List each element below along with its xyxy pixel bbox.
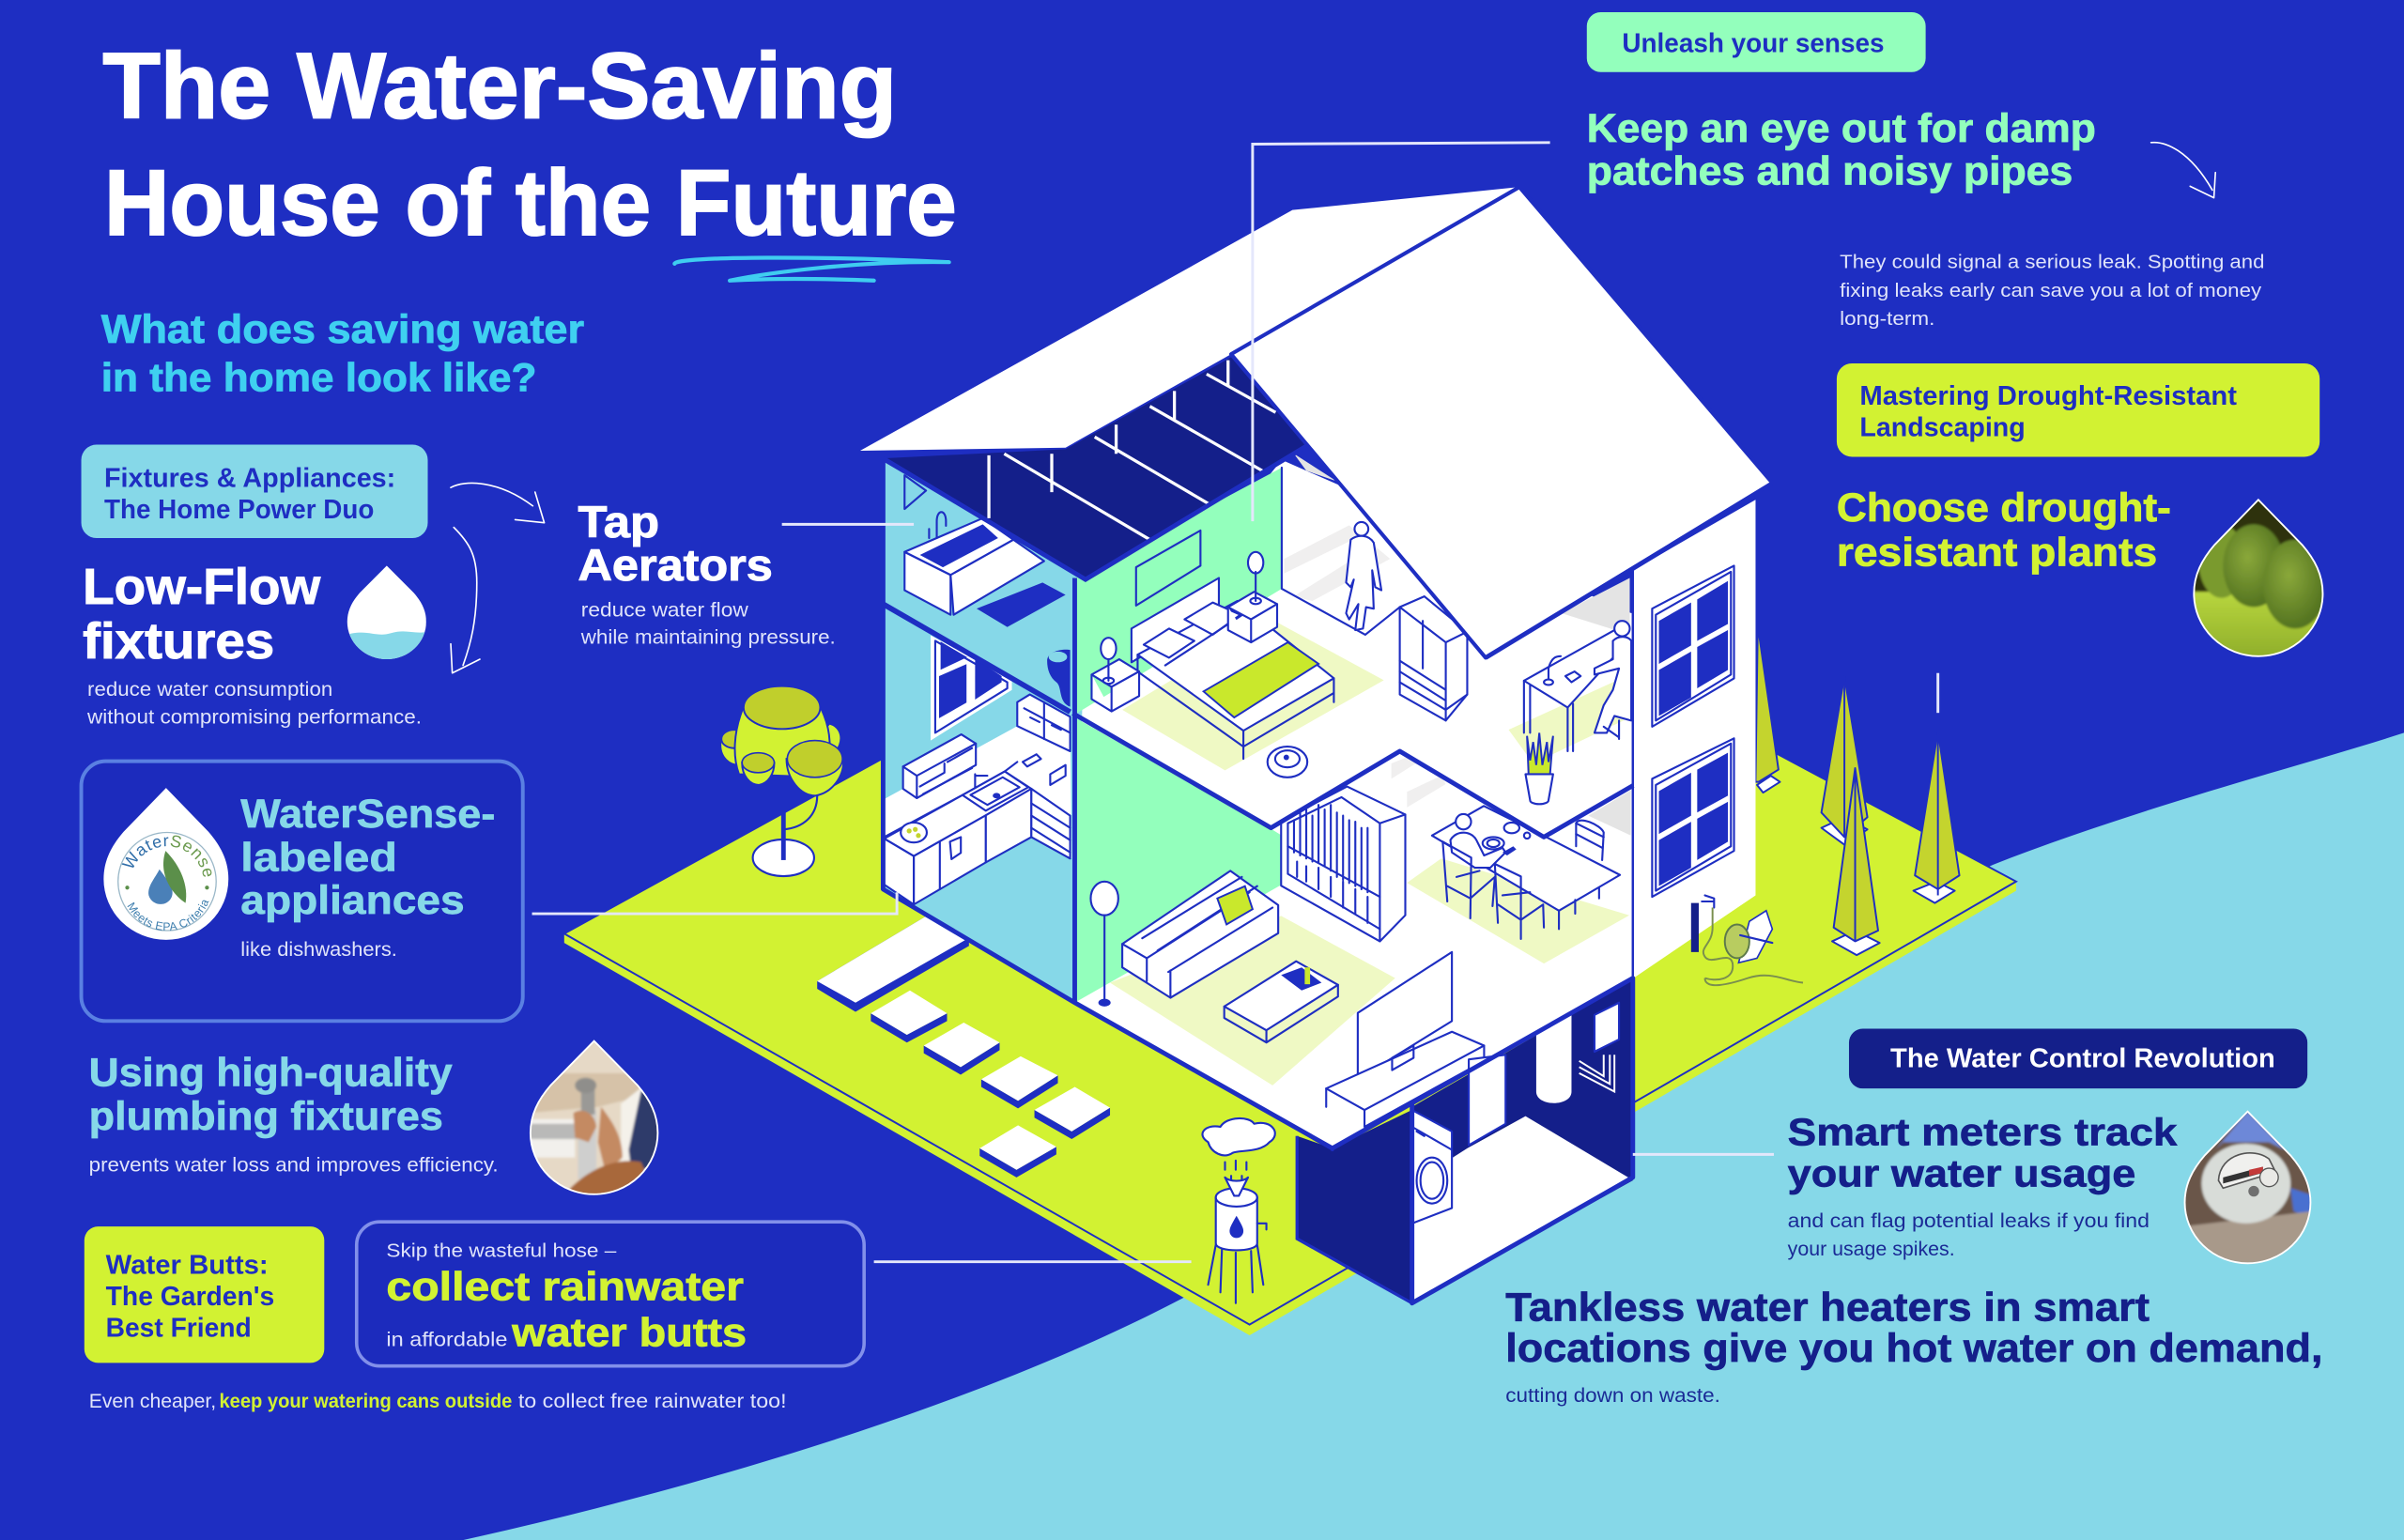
heading: drought-resistant plants: resistant plants — [1837, 530, 2157, 574]
panel: collect rainwater: water butts — [511, 1310, 747, 1354]
label: water butts — [85, 1226, 324, 1363]
isometric garden platform — [564, 514, 2016, 1335]
icon: plumbing photo drop — [529, 1040, 661, 1195]
text: leak explanation — [1840, 253, 2264, 330]
heading: tankless water heaters: cutting down on waste. — [1505, 1385, 1720, 1407]
label: fixtures and appliances: Fixtures & Appliances: — [104, 463, 395, 493]
house: bathroom and kitchen cyan wall — [883, 461, 1086, 1003]
panel: collect rainwater: collect rainwater — [386, 1264, 744, 1308]
heading: damp patches — [1587, 106, 2096, 193]
icon: WaterSense logo drop: WaterSense — [122, 836, 212, 877]
house: mint green walls — [1074, 468, 1282, 1003]
heading: smart meters: Smart meters track — [1788, 1111, 2178, 1154]
panel: collect rainwater — [357, 1222, 864, 1366]
label: water butts: Best Friend — [106, 1313, 252, 1343]
heading: damp patches: patches and noisy pipes — [1587, 149, 2073, 193]
label: drought-resistant landscaping: Landscaping — [1859, 412, 2026, 442]
arrow: to tap aerators — [451, 483, 545, 523]
title: House of the Future — [104, 151, 957, 255]
icon: WaterSense logo drop: Meets EPA Criteria — [128, 900, 208, 932]
heading: high-quality plumbing fixtures: prevents water loss and improves efficiency. — [89, 1154, 499, 1176]
label: unleash your senses: Unleash your senses — [1622, 29, 1885, 59]
title: The Water-Saving — [102, 35, 897, 139]
subtitle: in the home look like? — [101, 355, 536, 399]
house: lower room details — [1090, 756, 1631, 1127]
icon: left tree — [720, 686, 843, 876]
icon: rainwater butt with cloud — [1202, 1118, 1275, 1303]
text: leak explanation: fixing leaks early can save you a lot of money — [1840, 281, 2262, 301]
text: watering cans note: keep your watering cans outside — [219, 1391, 512, 1412]
subtitle — [101, 307, 584, 399]
house: kitchen with counters — [883, 636, 1071, 904]
house: basement utility room — [1297, 978, 1633, 1303]
label: fixtures and appliances — [82, 444, 428, 538]
background curve: light water area — [460, 732, 2404, 1540]
icon: step stones — [817, 916, 1110, 1178]
label: unleash your senses — [1587, 12, 1926, 72]
label: water butts: Water Butts: — [106, 1251, 269, 1281]
house: upper floor slab outline — [1074, 715, 1631, 837]
heading: smart meters: and can flag potential leaks if you find — [1788, 1210, 2150, 1232]
label: drought-resistant landscaping: Mastering Drought-Resistant — [1859, 381, 2238, 411]
panel: WaterSense appliances: labeled — [240, 835, 397, 879]
house: upper room details — [1091, 454, 1631, 804]
heading: drought-resistant plants — [1837, 485, 2171, 574]
heading: low-flow fixtures: fixtures — [83, 613, 274, 670]
text: leak explanation: They could signal a serious leak. Spotting and — [1840, 253, 2264, 273]
heading: low-flow fixtures: without compromising performance. — [86, 707, 422, 729]
text: watering cans note — [89, 1391, 787, 1412]
panel: WaterSense appliances: like dishwashers. — [240, 939, 397, 961]
heading: low-flow fixtures — [83, 559, 422, 729]
icon: garden tap and hose reel — [1691, 895, 1803, 985]
panel: WaterSense appliances: appliances — [240, 878, 465, 922]
label: fixtures and appliances: The Home Power Duo — [104, 495, 374, 525]
heading: tap aerators: Tap — [578, 498, 659, 547]
label: water butts: The Garden's — [106, 1282, 274, 1312]
heading: tankless water heaters: locations give you hot water on demand, — [1505, 1326, 2322, 1370]
text: leak explanation: long-term. — [1840, 309, 1934, 330]
icon: plants photo drop — [2193, 499, 2327, 657]
heading: smart meters: your water usage — [1788, 1152, 2135, 1195]
heading: smart meters — [1788, 1111, 2178, 1260]
heading: drought-resistant plants: Choose drought- — [1837, 485, 2171, 530]
house: bathroom tub and floor — [904, 475, 1071, 707]
house: right outer wall with windows — [1633, 500, 1755, 981]
heading: damp patches: Keep an eye out for damp — [1587, 106, 2096, 150]
title underline scribble — [674, 257, 949, 281]
title — [102, 35, 957, 255]
panel: collect rainwater: Skip the wasteful hose – — [386, 1240, 617, 1261]
panel: collect rainwater: in affordable — [386, 1329, 507, 1350]
subtitle: What does saving water — [101, 307, 584, 351]
heading: tap aerators — [578, 498, 836, 649]
house: roof panels — [860, 187, 1772, 657]
icon: pine trees — [1755, 625, 1960, 955]
heading: high-quality plumbing fixtures — [89, 1051, 499, 1176]
house: lower floor front edge and wall lines — [883, 461, 1333, 1148]
icon: water meter photo drop — [2183, 1110, 2314, 1267]
text: watering cans note: Even cheaper, — [89, 1391, 216, 1412]
heading: low-flow fixtures: Low-Flow — [83, 559, 320, 615]
heading: tankless water heaters — [1505, 1286, 2322, 1407]
icon: WaterSense logo drop — [103, 788, 229, 940]
heading: tankless water heaters: Tankless water heaters in smart — [1505, 1286, 2150, 1330]
heading: high-quality plumbing fixtures: Using high-quality — [89, 1051, 453, 1095]
heading: low-flow fixtures: reduce water consumption — [87, 679, 332, 701]
heading: tap aerators: while maintaining pressure. — [580, 627, 836, 649]
heading: smart meters: your usage spikes. — [1788, 1239, 1955, 1260]
label: the water control revolution: The Water Control Revolution — [1890, 1043, 2275, 1073]
icon: water drop half full — [347, 565, 428, 661]
heading: tap aerators: Aerators — [578, 541, 773, 591]
house: roof underside and joists — [883, 357, 1306, 579]
label: drought-resistant landscaping — [1837, 363, 2319, 457]
arrow: to low-flow fixtures — [451, 528, 480, 673]
heading: tap aerators: reduce water flow — [581, 599, 748, 621]
label: the water control revolution — [1849, 1029, 2307, 1088]
panel: WaterSense appliances — [79, 759, 525, 1024]
house: white interior shell — [1074, 460, 1755, 1148]
heading: high-quality plumbing fixtures: plumbing fixtures — [89, 1094, 443, 1138]
text: watering cans note: to collect free rainwater too! — [518, 1391, 787, 1412]
panel: WaterSense appliances: WaterSense- — [240, 792, 495, 836]
connector lines — [532, 143, 1938, 1262]
arrow: to leak text — [2151, 143, 2215, 198]
